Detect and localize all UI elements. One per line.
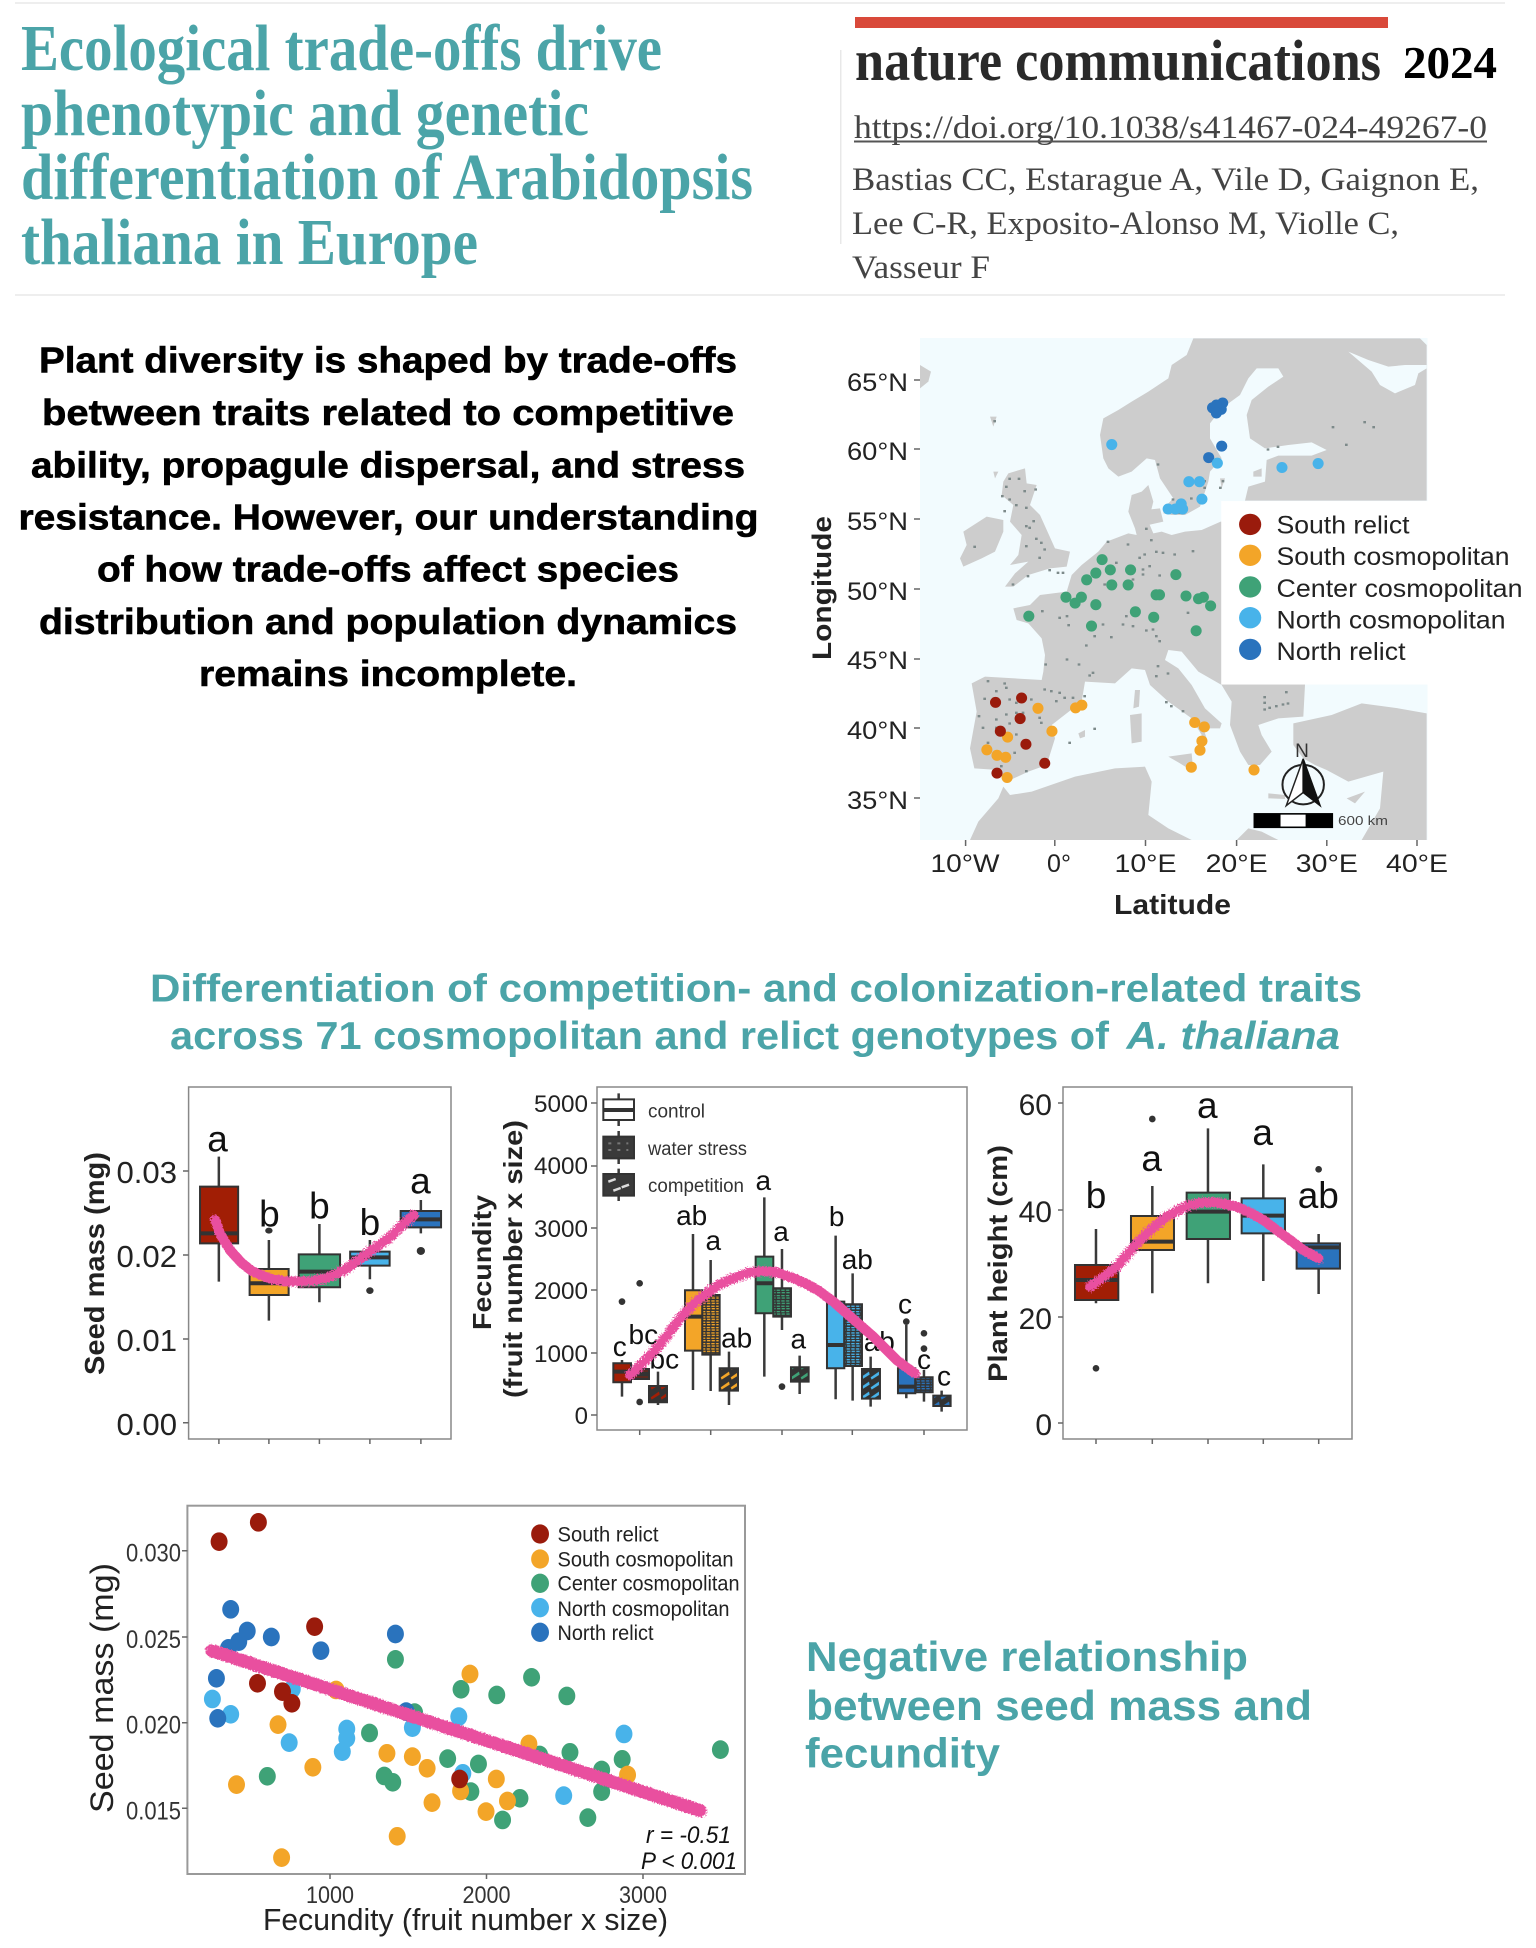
section heading: across 71 cosmopolitan and relict genotypes of bbox=[170, 1015, 1110, 1058]
map legend labels: North relict bbox=[1276, 638, 1406, 666]
boxes and treatment legend keys bbox=[603, 1093, 951, 1412]
fitted curve bbox=[1090, 1202, 1318, 1287]
map of Europe with genotypes bbox=[920, 338, 1428, 840]
y axis title: Seed mass (mg) bbox=[79, 1152, 110, 1375]
south relict points bbox=[211, 1513, 468, 1788]
statistics annotation: P < 0.001 bbox=[641, 1848, 737, 1875]
map latitude labels: 40°N bbox=[847, 717, 908, 745]
intro paragraph: distribution and population dynamics bbox=[39, 601, 737, 642]
significance letters: bc bbox=[650, 1344, 679, 1375]
section heading: Differentiation of competition- and colonization-related traits bbox=[150, 968, 1362, 1011]
significance letters: a bbox=[791, 1323, 807, 1354]
negative relationship caption bbox=[805, 1633, 1312, 1777]
map latitude labels: 35°N bbox=[847, 787, 908, 815]
significance letters bbox=[207, 1119, 431, 1243]
significance letters: b bbox=[829, 1201, 844, 1232]
y axis title: Fecundity bbox=[467, 1194, 497, 1330]
map longitude labels: 10°E bbox=[1114, 850, 1176, 878]
y tick labels: 0.025 bbox=[126, 1626, 181, 1654]
map latitude labels bbox=[847, 369, 908, 815]
map axis ticks bbox=[914, 380, 1417, 846]
chart: seed mass boxplot bbox=[79, 1087, 451, 1444]
occurrence points bbox=[973, 420, 1375, 772]
legend labels: South cosmopolitan bbox=[558, 1549, 734, 1572]
boxes bbox=[200, 1157, 441, 1321]
map latitude labels: 45°N bbox=[847, 647, 908, 675]
significance letters: a bbox=[1252, 1112, 1273, 1153]
authors bbox=[852, 162, 1479, 286]
legend labels: Center cosmopolitan bbox=[558, 1573, 740, 1596]
y tick labels: 20 bbox=[1019, 1303, 1052, 1336]
north relict points bbox=[208, 1600, 415, 1728]
map latitude labels: 60°N bbox=[847, 438, 908, 466]
title: thaliana in Europe bbox=[21, 206, 478, 279]
y axis title: Seed mass (mg) bbox=[84, 1563, 120, 1813]
map longitude labels: 10°W bbox=[930, 850, 1000, 878]
statistics annotation bbox=[641, 1822, 737, 1875]
significance letters: a bbox=[756, 1165, 772, 1196]
section heading bbox=[150, 968, 1362, 1058]
intro paragraph bbox=[18, 340, 758, 694]
y tick labels: 0.00 bbox=[116, 1407, 177, 1442]
map longitude labels: 20°E bbox=[1206, 850, 1268, 878]
map longitude labels: 0° bbox=[1047, 850, 1071, 878]
boxes bbox=[1075, 1116, 1340, 1372]
significance letters: b bbox=[259, 1194, 280, 1235]
intro paragraph: between traits related to competitive bbox=[42, 392, 734, 433]
north cosmopolitan points bbox=[1106, 439, 1324, 515]
white sea inlet bbox=[1348, 352, 1427, 393]
x tick labels: 1000 bbox=[306, 1882, 354, 1909]
y tick labels: 5000 bbox=[534, 1091, 588, 1118]
y tick labels: 0.01 bbox=[116, 1323, 177, 1358]
title: differentiation of Arabidopsis bbox=[21, 141, 753, 214]
y tick labels: 0 bbox=[575, 1403, 588, 1430]
chart: seed mass vs fecundity scatter bbox=[84, 1506, 745, 1937]
sea bbox=[920, 338, 1428, 840]
y tick labels bbox=[534, 1091, 588, 1430]
center cosmopolitan points bbox=[259, 1650, 729, 1829]
legend labels: North cosmopolitan bbox=[558, 1598, 730, 1621]
title: Ecological trade-offs drive bbox=[21, 12, 662, 85]
y tick labels: 1000 bbox=[534, 1341, 588, 1368]
section heading: A. thaliana bbox=[1125, 1015, 1340, 1058]
y tick labels: 2000 bbox=[534, 1278, 588, 1305]
y axis title bbox=[467, 1120, 528, 1398]
y tick labels: 0.015 bbox=[126, 1797, 181, 1825]
y tick labels: 0.020 bbox=[126, 1712, 181, 1740]
intro paragraph: ability, propagule dispersal, and stress bbox=[31, 444, 745, 485]
significance letters: b bbox=[360, 1202, 380, 1243]
significance letters: a bbox=[773, 1216, 789, 1247]
significance letters: a bbox=[1197, 1085, 1218, 1126]
journal name: nature communications bbox=[855, 28, 1381, 93]
treatment legend labels: water stress bbox=[647, 1139, 747, 1160]
y tick labels bbox=[116, 1155, 177, 1442]
intro paragraph: of how trade-offs affect species bbox=[97, 548, 679, 589]
frame bbox=[1063, 1087, 1352, 1439]
north arrow letter: N bbox=[1295, 741, 1309, 762]
map latitude labels: 50°N bbox=[847, 578, 908, 606]
x tick labels: 2000 bbox=[462, 1882, 510, 1909]
title: phenotypic and genetic bbox=[21, 77, 589, 150]
header divider lines bbox=[15, 2, 1505, 296]
significance letters: c bbox=[917, 1344, 931, 1375]
legend labels bbox=[558, 1524, 740, 1645]
significance letters bbox=[613, 1165, 951, 1392]
statistics annotation: r = -0.51 bbox=[646, 1822, 731, 1849]
significance letters: bc bbox=[629, 1319, 658, 1350]
map overlays bbox=[981, 397, 1428, 828]
significance letters: a bbox=[410, 1160, 431, 1201]
map longitude labels: 30°E bbox=[1296, 850, 1358, 878]
negative relationship caption: Negative relationship bbox=[806, 1633, 1248, 1680]
y tick labels: 60 bbox=[1019, 1089, 1052, 1122]
significance letters bbox=[1086, 1085, 1339, 1216]
frame bbox=[187, 1506, 745, 1874]
chart: plant height boxplot bbox=[983, 1085, 1352, 1444]
authors: Lee C-R, Exposito-Alonso M, Violle C, bbox=[852, 206, 1399, 242]
map longitude labels: 40°E bbox=[1386, 850, 1448, 878]
intro paragraph: remains incomplete. bbox=[199, 653, 577, 694]
intro paragraph: Plant diversity is shaped by trade-offs bbox=[39, 340, 737, 381]
scale bar bbox=[1254, 813, 1333, 828]
doi link: https://doi.org/10.1038/s41467-024-49267-0 bbox=[854, 110, 1487, 146]
significance letters: c bbox=[613, 1331, 627, 1362]
significance letters: ab bbox=[864, 1326, 895, 1357]
y axis title: Plant height (cm) bbox=[983, 1145, 1013, 1382]
red journal bar bbox=[855, 17, 1388, 28]
center cosmopolitan points bbox=[1023, 554, 1216, 636]
treatment legend labels bbox=[647, 1102, 747, 1197]
map axis title: Longitude: Longitude bbox=[807, 516, 837, 660]
y tick labels bbox=[126, 1540, 181, 1825]
y tick labels: 3000 bbox=[534, 1216, 588, 1243]
significance letters: ab bbox=[676, 1200, 707, 1231]
y tick labels: 0.02 bbox=[116, 1239, 177, 1274]
negative relationship caption: fecundity bbox=[805, 1730, 1001, 1777]
regression line bbox=[212, 1651, 700, 1811]
significance letters: c bbox=[937, 1361, 951, 1392]
north relict points bbox=[1203, 397, 1228, 463]
scatter points bbox=[204, 1513, 729, 1867]
year: 2024 bbox=[1403, 37, 1497, 88]
significance letters: b bbox=[1086, 1175, 1106, 1216]
south cosmopolitan points bbox=[228, 1665, 636, 1867]
y tick labels: 40 bbox=[1019, 1196, 1052, 1229]
y tick labels: 0.03 bbox=[116, 1155, 177, 1190]
y tick labels: 0.030 bbox=[126, 1540, 181, 1568]
significance letters: ab bbox=[842, 1244, 873, 1275]
legend dots bbox=[1239, 514, 1261, 660]
intro paragraph: resistance. However, our understanding bbox=[18, 496, 758, 537]
south relict points bbox=[990, 692, 1050, 779]
map legend labels bbox=[1276, 512, 1522, 666]
legend dots bbox=[531, 1524, 549, 1642]
map legend labels: South relict bbox=[1276, 512, 1410, 540]
treatment legend labels: control bbox=[648, 1102, 705, 1123]
y tick labels: 0 bbox=[1035, 1409, 1052, 1442]
map legend labels: South cosmopolitan bbox=[1276, 543, 1510, 571]
scale label: 600 km bbox=[1338, 813, 1388, 828]
significance letters: ab bbox=[721, 1322, 752, 1353]
chart: fecundity boxplot bbox=[467, 1087, 967, 1435]
map longitude labels bbox=[930, 850, 1448, 878]
y axis title: (fruit number x size) bbox=[498, 1120, 528, 1398]
fitted curve bbox=[630, 1271, 915, 1375]
frame bbox=[189, 1087, 451, 1439]
significance letters: a bbox=[207, 1119, 228, 1160]
south cosmopolitan points bbox=[981, 700, 1260, 783]
map legend labels: North cosmopolitan bbox=[1276, 606, 1506, 634]
north arrow bbox=[1282, 759, 1324, 806]
authors: Vasseur F bbox=[852, 250, 990, 286]
map latitude labels: 65°N bbox=[847, 369, 908, 397]
y tick labels bbox=[1019, 1089, 1052, 1442]
frame bbox=[597, 1087, 967, 1430]
x axis title: Fecundity (fruit number x size) bbox=[263, 1902, 668, 1937]
journal block bbox=[852, 17, 1497, 286]
legend labels: South relict bbox=[558, 1524, 659, 1547]
treatment legend labels: competition bbox=[648, 1176, 744, 1197]
title bbox=[21, 12, 753, 279]
y tick labels: 4000 bbox=[534, 1153, 588, 1180]
x tick labels bbox=[306, 1882, 667, 1909]
land masses bbox=[920, 338, 1427, 840]
authors: Bastias CC, Estarague A, Vile D, Gaignon E, bbox=[852, 162, 1479, 198]
significance letters: a bbox=[1141, 1138, 1162, 1179]
x tick labels: 3000 bbox=[619, 1882, 667, 1909]
legend labels: North relict bbox=[558, 1622, 654, 1645]
map artwork bbox=[920, 338, 1428, 840]
north cosmopolitan points bbox=[204, 1680, 632, 1805]
legend background bbox=[1221, 501, 1428, 685]
map axis title: Latitude: Latitude bbox=[1114, 889, 1231, 920]
map legend labels: Center cosmopolitan bbox=[1276, 575, 1522, 603]
fitted curve bbox=[215, 1215, 414, 1282]
significance letters: c bbox=[898, 1288, 912, 1319]
map latitude labels: 55°N bbox=[847, 508, 908, 536]
significance letters: a bbox=[706, 1225, 722, 1256]
significance letters: ab bbox=[1298, 1175, 1339, 1216]
negative relationship caption: between seed mass and bbox=[806, 1682, 1312, 1729]
significance letters: b bbox=[309, 1185, 330, 1226]
